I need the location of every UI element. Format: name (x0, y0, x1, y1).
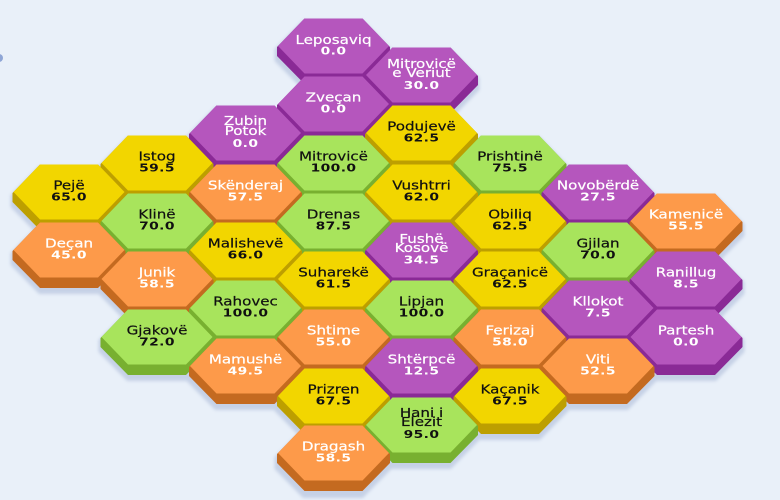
hex: Klinë: 70.0 (139, 219, 175, 232)
hex: Zubin Potok: Zubin (224, 114, 267, 129)
hex: Ferizaj: Ferizaj (486, 324, 534, 338)
hex: Partesh: Partesh (658, 324, 714, 338)
hex: Gjakovë (100, 310, 214, 375)
hex: Kamenicë: 55.5 (668, 219, 704, 232)
hex: Mamushë: 49.5 (228, 364, 263, 377)
hex: Zveçan (277, 76, 390, 142)
hex: Hani i Elezit: 95.0 (404, 427, 439, 441)
hex: Zubin Potok: 0.0 (233, 136, 258, 150)
hex: Mitrovicë e Veriut (365, 48, 478, 113)
hex: Fushë Kosovë: 34.5 (404, 253, 439, 266)
hex: Vushtrri: 62.0 (404, 190, 439, 203)
hex: Istog (100, 136, 214, 201)
hex: Hani i Elezit (365, 398, 478, 463)
hex: Deçan: 45.0 (51, 248, 87, 261)
hex: Prishtinë: Prishtinë (477, 150, 543, 164)
hex: Pejë: Pejë (53, 179, 85, 193)
hex: Skënderaj: 57.5 (228, 190, 263, 203)
hex: Suharekë: Suharekë (298, 266, 369, 280)
hex: Gjilan: Gjilan (576, 237, 620, 251)
hex: Mitrovicë e Veriut: 30.0 (404, 78, 439, 92)
hex: Rahovec: 100.0 (223, 306, 268, 319)
hex: Kaçanik (454, 368, 566, 434)
hex: Zubin Potok (189, 106, 302, 171)
hex: Mitrovicë: 100.0 (311, 161, 356, 174)
hex: Skënderaj: Skënderaj (208, 179, 283, 193)
hex: Ferizaj: 58.0 (492, 335, 528, 348)
hex: Prishtinë (454, 136, 566, 201)
hex: Lipjan: 100.0 (399, 306, 444, 319)
hex: Kllokot (542, 280, 654, 346)
hex: Fushë Kosovë (365, 222, 478, 288)
hex: Pejë (12, 164, 126, 230)
hex: Podujevë (365, 106, 478, 171)
hex: Gjilan: 70.0 (580, 248, 616, 261)
hex: Skënderaj (189, 164, 302, 230)
hex: Graçanicë (454, 252, 566, 317)
hex: Fushë Kosovë: Fushë (399, 232, 444, 247)
hex: Suharekë: 61.5 (316, 277, 351, 290)
hex: Graçanicë: 62.5 (492, 277, 528, 290)
hex: Kllokot: Kllokot (573, 295, 624, 309)
hex: Fushë Kosovë: Kosovë (395, 241, 448, 256)
hex: Shtime (277, 310, 390, 375)
hex: Obiliq (454, 194, 566, 259)
hex: Shtërpcë: 12.5 (404, 364, 439, 377)
hex: Ranillug (630, 252, 742, 317)
hex: Podujevë: Podujevë (387, 120, 456, 134)
hex: Zubin Potok: Potok (225, 124, 266, 139)
hex: Drenas: Drenas (307, 208, 360, 222)
hex: Istog: Istog (138, 150, 176, 164)
hex: Vushtrri: Vushtrri (392, 179, 451, 193)
hex: Malishevë: 66.0 (228, 248, 263, 261)
hex: Mitrovicë: Mitrovicë (299, 150, 368, 164)
hex: Mamushë: Mamushë (209, 353, 282, 367)
hex: Viti: 52.5 (580, 364, 616, 377)
hex: Mitrovicë (277, 136, 390, 201)
hex: Leposaviq (277, 18, 390, 84)
hex: Gjilan (542, 222, 654, 288)
hex: Prizren: Prizren (308, 383, 359, 397)
hex: Lipjan (365, 280, 478, 346)
hex: Kamenicë (630, 194, 742, 259)
hex: Partesh (630, 310, 742, 375)
hex: Leposaviq: 0.0 (321, 44, 346, 57)
hex: Rahovec: Rahovec (213, 295, 278, 309)
hex: Dragash (277, 426, 390, 491)
hex: Shtime: Shtime (307, 324, 360, 338)
hex: Dragash: Dragash (302, 440, 365, 454)
hex: Rahovec (189, 280, 302, 346)
hex: Junik (100, 252, 214, 317)
hex: Prizren: 67.5 (316, 394, 351, 407)
hex: Klinë: Klinë (138, 208, 176, 222)
hex: Obiliq: Obiliq (488, 208, 532, 222)
hex: Kaçanik: 67.5 (492, 394, 528, 407)
hex: Malishevë: Malishevë (208, 237, 283, 251)
hex: Gjakovë: Gjakovë (127, 324, 187, 338)
hex: Podujevë: 62.5 (404, 131, 439, 144)
hex: Zveçan: Zveçan (306, 91, 361, 105)
hex: Drenas (277, 194, 390, 259)
hex: Malishevë (189, 222, 302, 288)
hex: Mamushë (189, 338, 302, 404)
hex: Zveçan: 0.0 (321, 102, 346, 115)
hex: Deçan (12, 222, 126, 288)
hex: Junik: 58.5 (139, 277, 175, 290)
hex: Klinë (100, 194, 214, 259)
hex: Shtërpcë: Shtërpcë (388, 353, 455, 367)
hex: Vushtrri (365, 164, 478, 230)
hex: Drenas: 87.5 (316, 219, 351, 232)
hex: Obiliq: 62.5 (492, 219, 528, 232)
hex: Hani i Elezit: Elezit (401, 415, 443, 430)
hex: Viti: Viti (586, 353, 610, 367)
hex: Suharekë (277, 252, 390, 317)
hex: Viti (542, 338, 654, 404)
hex: Ranillug: Ranillug (656, 266, 716, 280)
hex: Kaçanik: Kaçanik (481, 383, 540, 397)
hex: Hani i Elezit: Hani i (400, 406, 443, 421)
hex: Graçanicë: Graçanicë (472, 266, 548, 280)
hex: Prizren (277, 368, 390, 434)
hex: Shtime: 55.0 (316, 335, 351, 348)
hex: Junik: Junik (138, 266, 175, 280)
hex: Kamenicë: Kamenicë (649, 208, 723, 222)
hex: Ranillug: 8.5 (673, 277, 699, 290)
hex: Novobërdë (542, 164, 654, 230)
hex: Novobërdë: Novobërdë (557, 179, 639, 193)
hex: Mitrovicë e Veriut: Mitrovicë (387, 57, 456, 72)
hex: Shtërpcë (365, 338, 478, 404)
hex: Gjakovë: 72.0 (139, 335, 175, 348)
hex: Kllokot: 7.5 (585, 306, 611, 319)
hex: Mitrovicë e Veriut: e Veriut (392, 66, 451, 81)
hex: Novobërdë: 27.5 (580, 190, 616, 203)
hex: Lipjan: Lipjan (399, 295, 444, 309)
hex: Dragash: 58.5 (316, 451, 351, 464)
hex: Prishtinë: 75.5 (492, 161, 528, 174)
hex: Deçan: Deçan (45, 237, 93, 251)
hex: Istog: 59.5 (139, 161, 175, 174)
edge dot (0, 54, 3, 62)
hex: Ferizaj (454, 310, 566, 375)
hex: Leposaviq: Leposaviq (295, 33, 372, 48)
hex: Pejë: 65.0 (51, 190, 87, 203)
hex: Partesh: 0.0 (673, 335, 699, 348)
